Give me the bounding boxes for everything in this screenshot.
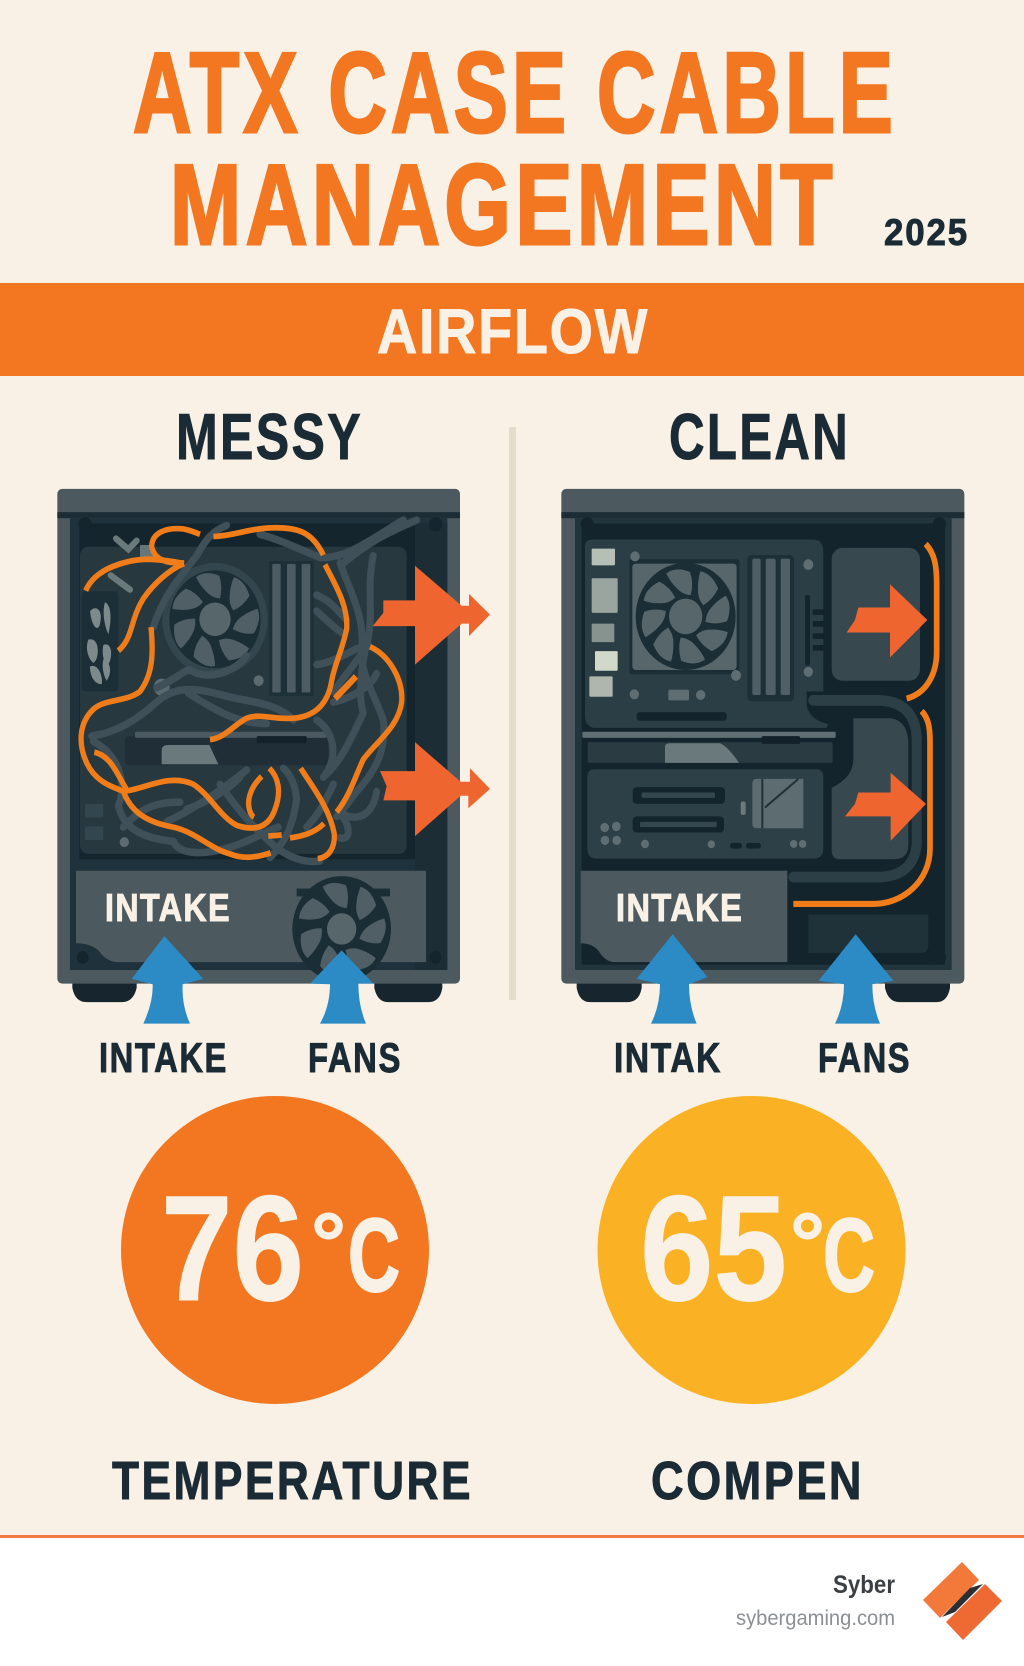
intake arrow left bbox=[132, 936, 203, 1024]
caption: compen: COMPEN bbox=[651, 1451, 864, 1511]
temperature circle: 65: ° bbox=[790, 1196, 825, 1290]
hot air arrow bottom bbox=[845, 773, 926, 841]
corner screws bbox=[581, 951, 593, 964]
year label: 2025 bbox=[884, 212, 969, 253]
CPU cooler bbox=[629, 559, 739, 674]
shroud fan bbox=[292, 876, 391, 982]
CPU fan bbox=[162, 563, 268, 676]
connector pipes bbox=[111, 539, 137, 590]
labels under messy case bbox=[99, 1034, 402, 1081]
labels under clean case bbox=[614, 1034, 911, 1081]
board screws bbox=[120, 675, 264, 847]
temperature circle: 65: C bbox=[823, 1198, 875, 1314]
PSU shroud bbox=[76, 871, 426, 962]
labels under clean case: INTAK bbox=[614, 1034, 722, 1081]
intake arrow left bbox=[637, 934, 707, 1024]
RAM sticks bbox=[747, 555, 794, 701]
temperature circle: 76: 76 bbox=[161, 1164, 304, 1332]
case feet bbox=[72, 981, 442, 1002]
upper radiator box bbox=[832, 548, 920, 681]
graphics card bbox=[582, 732, 836, 763]
routed tube bbox=[793, 700, 917, 877]
temperature circle: 76: C bbox=[348, 1198, 400, 1314]
temperature circle: 65 bbox=[598, 1096, 906, 1404]
rear IO blocks bbox=[589, 549, 618, 697]
panel: messy case illustration bbox=[57, 489, 490, 1024]
brand name: Syber bbox=[833, 1571, 895, 1599]
footer bbox=[0, 1535, 1024, 1666]
case feet bbox=[577, 981, 950, 1002]
orange tidy cable lower bbox=[793, 711, 930, 904]
panel: clean case illustration bbox=[561, 489, 964, 1024]
heading: messy: MESSY bbox=[176, 400, 363, 473]
title bbox=[133, 30, 897, 269]
section band: airflow: AIRFLOW bbox=[377, 297, 649, 367]
lower board bbox=[587, 769, 823, 859]
case intake label: INTAKE bbox=[105, 887, 231, 930]
motherboard bbox=[585, 540, 828, 728]
temperature circle: 76: ° bbox=[311, 1196, 346, 1290]
caption: temperature: TEMPERATURE bbox=[112, 1451, 473, 1511]
RAM sticks bbox=[269, 561, 314, 696]
labels under messy case: INTAKE bbox=[99, 1034, 228, 1081]
graphics card bbox=[125, 732, 328, 765]
center divider bbox=[509, 427, 516, 1000]
tangled grey cables bbox=[92, 520, 417, 861]
labels under messy case: FANS bbox=[308, 1034, 402, 1081]
lower drive box bbox=[832, 718, 908, 859]
intake arrow right bbox=[310, 950, 373, 1024]
labels under clean case: FANS bbox=[818, 1034, 911, 1081]
orange tidy cable upper bbox=[907, 544, 937, 699]
temperature circle: 76 bbox=[121, 1096, 429, 1404]
exhaust arrow bottom bbox=[380, 742, 490, 836]
case body bbox=[561, 489, 964, 984]
section band: airflow bbox=[0, 283, 1024, 376]
board screws and headers bbox=[630, 551, 813, 700]
left rear fan bbox=[82, 591, 118, 691]
corner screws bbox=[77, 951, 89, 964]
website: sybergaming.com bbox=[736, 1607, 895, 1630]
temperature circle: 65: 65 bbox=[640, 1164, 787, 1332]
heading: clean: CLEAN bbox=[669, 400, 850, 473]
exhaust arrow top bbox=[373, 566, 490, 665]
hot air arrow top bbox=[847, 584, 927, 657]
case intake label: INTAKE bbox=[616, 887, 743, 930]
case body bbox=[57, 489, 460, 984]
PSU shroud bbox=[581, 871, 787, 962]
orange messy cables bbox=[81, 528, 402, 859]
intake arrow right bbox=[819, 934, 893, 1024]
bottom right bay bbox=[808, 915, 928, 953]
logo bbox=[923, 1562, 1002, 1640]
